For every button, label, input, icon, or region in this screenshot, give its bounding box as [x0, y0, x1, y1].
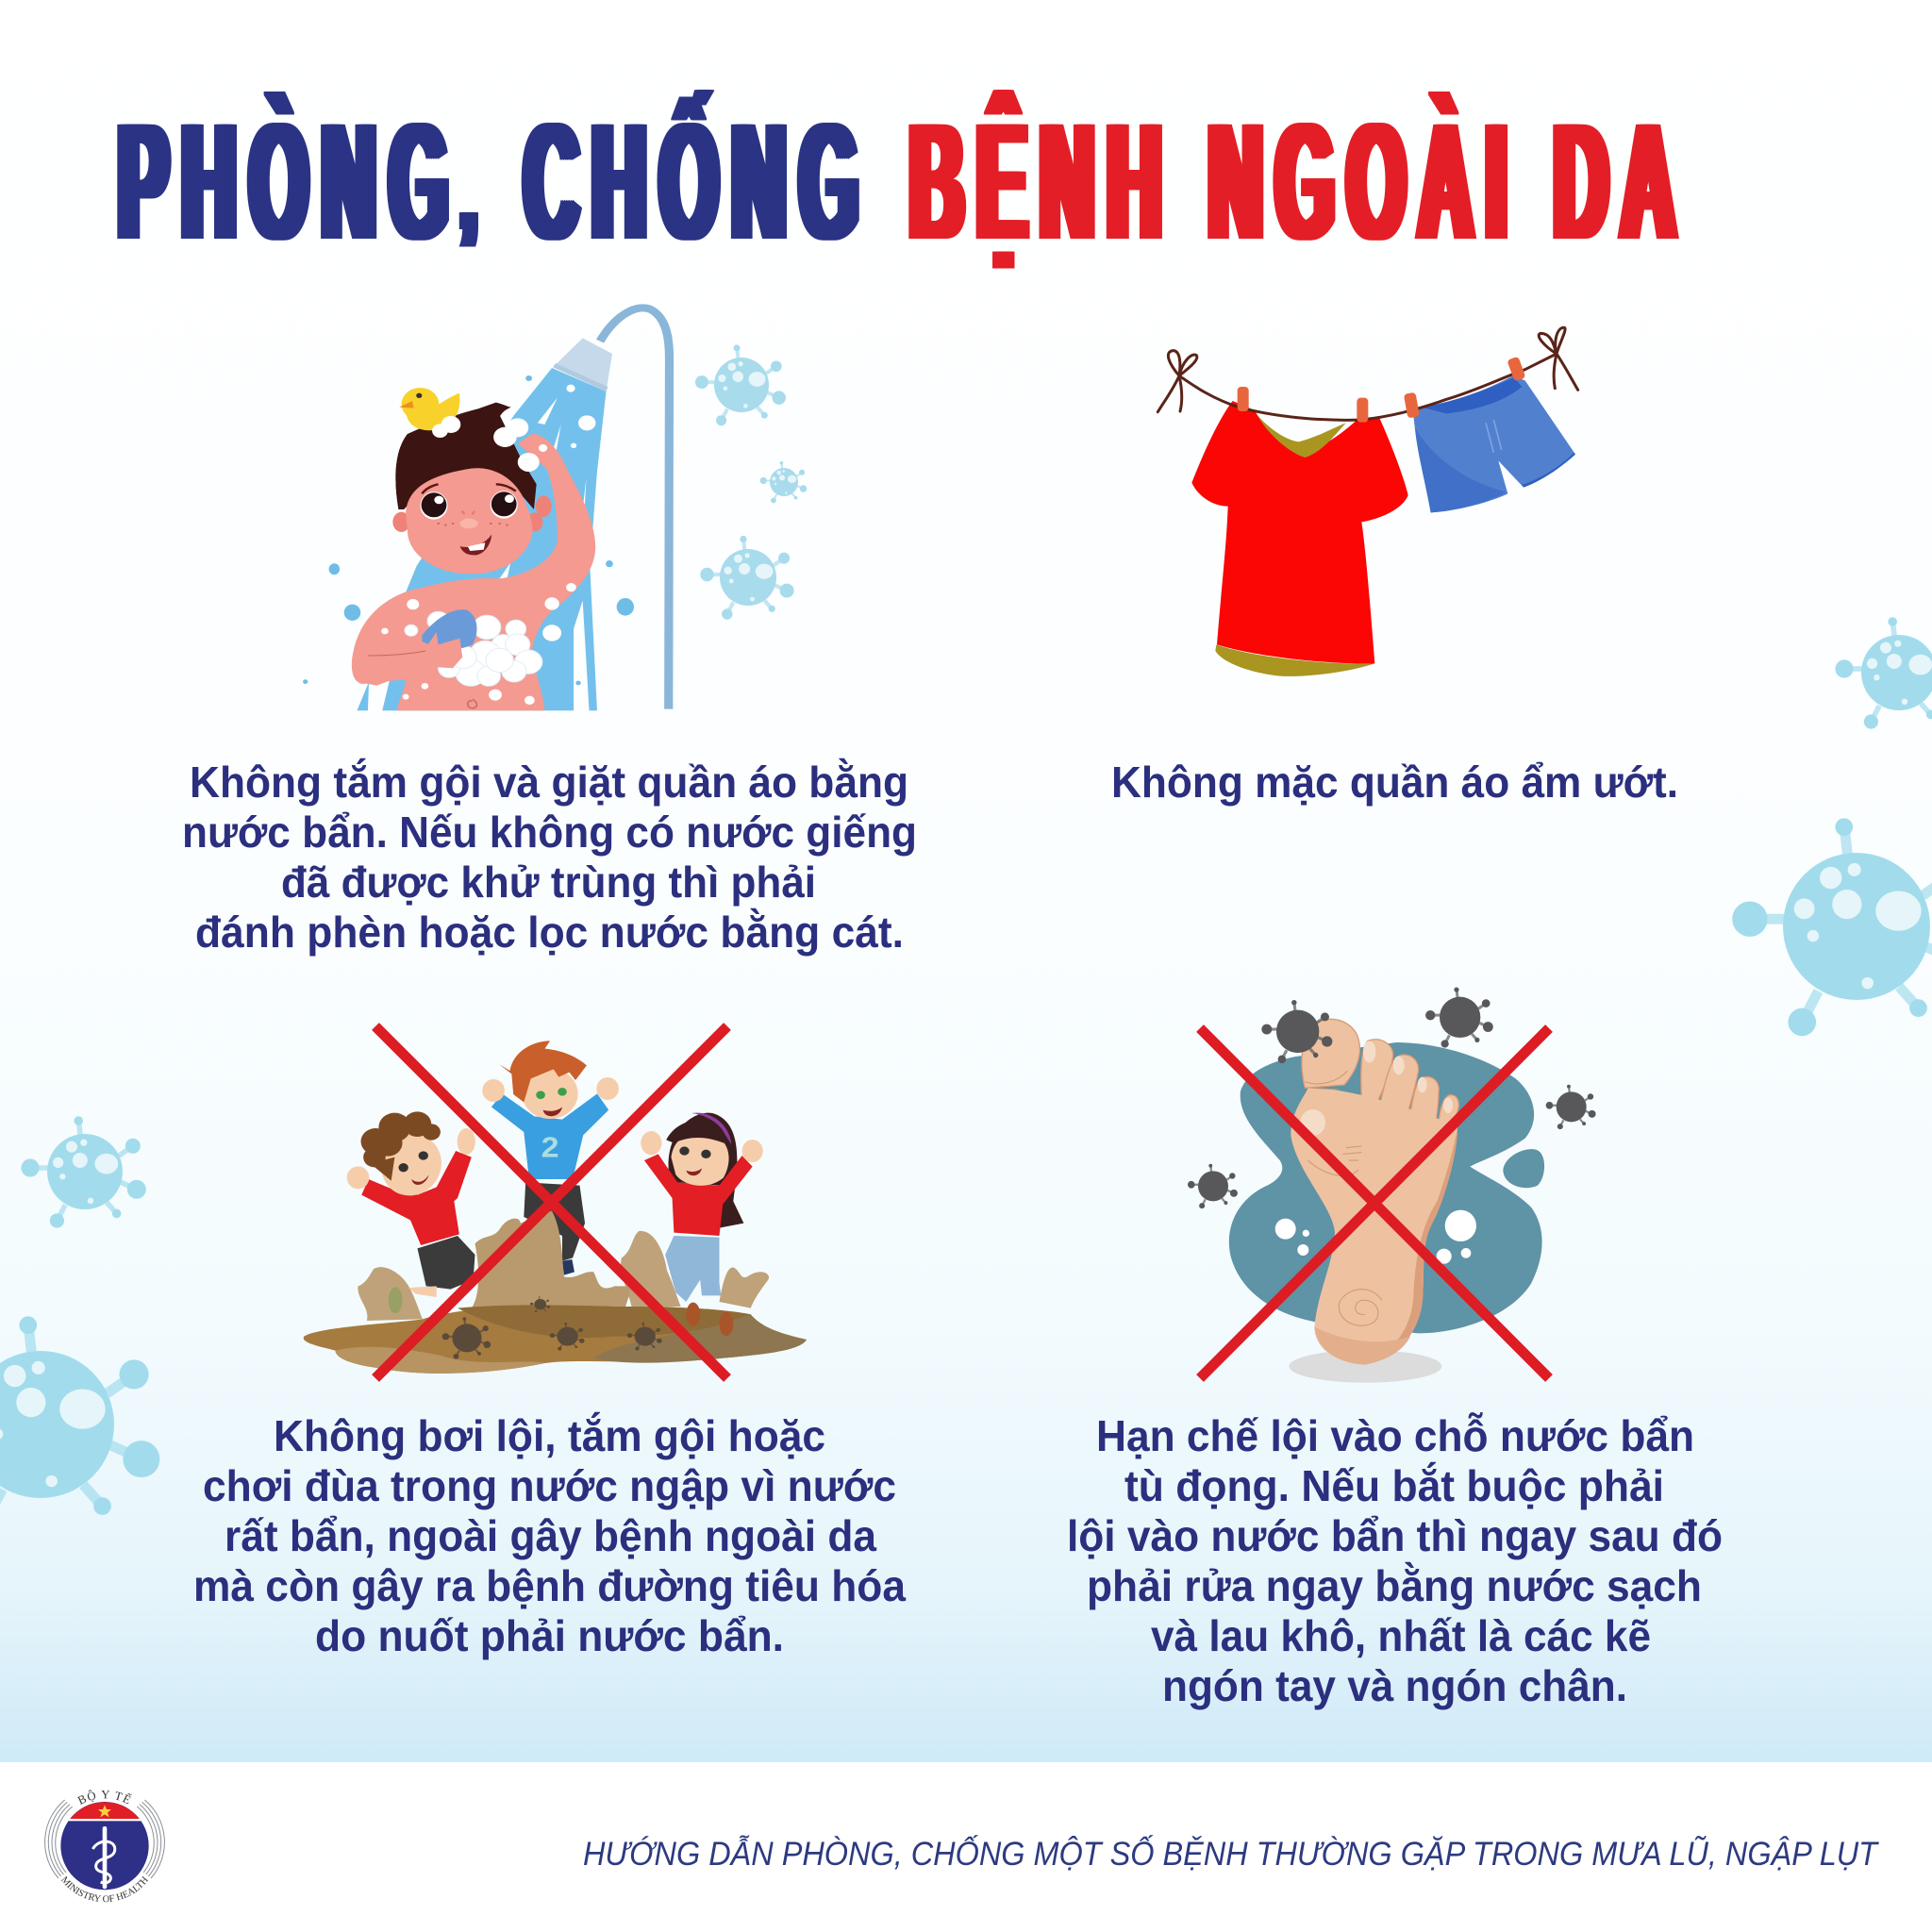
- eyes and mouth: [398, 1151, 429, 1185]
- puddle dark band: [458, 1305, 751, 1338]
- illustration: children in floodwater: [304, 1041, 807, 1374]
- text: dirty water advice: ngón tay và ngón chân.: [1162, 1661, 1627, 1710]
- hair fringe: [395, 403, 518, 509]
- navel: [468, 699, 476, 708]
- sole: [1291, 1088, 1457, 1365]
- text: dirty water advice: và lau khô, nhất là các kẽ: [1151, 1611, 1651, 1660]
- back mud splashes: [358, 1231, 769, 1321]
- side shading: [1365, 1129, 1457, 1365]
- hand on sponge: [358, 632, 462, 686]
- number on sweater: 2: [541, 1131, 559, 1163]
- skin bubbles: [381, 385, 595, 705]
- shorts hem: [1522, 453, 1575, 488]
- face: [671, 1132, 729, 1186]
- shower pipe: [600, 308, 669, 709]
- mud viruses: [442, 1296, 662, 1359]
- virus: large left: [0, 1316, 159, 1534]
- shorts: [1413, 375, 1575, 512]
- body foam: [405, 611, 542, 686]
- headband: [691, 1113, 731, 1144]
- heel creases: [1314, 1327, 1410, 1365]
- shirt lining: [1215, 413, 1374, 676]
- girl's shoes: [686, 1303, 733, 1336]
- nose and freckles: [439, 511, 508, 528]
- virus: large right: [1732, 818, 1932, 1036]
- clothes pegs: [1238, 357, 1525, 423]
- text: shower advice: đã được khử trùng thì phải: [281, 858, 816, 907]
- jeans: [665, 1236, 721, 1302]
- boy middle: [482, 1041, 619, 1275]
- eyes and mouth: [536, 1088, 567, 1116]
- dark viruses: [1188, 987, 1596, 1208]
- shirt: [1191, 401, 1408, 664]
- puddle shading: [593, 1314, 807, 1363]
- text: floodwater advice: rất bẩn, ngoài gây bệnh ngoài da: [225, 1511, 876, 1560]
- hands: [641, 1131, 763, 1162]
- girl: [641, 1113, 763, 1302]
- sweater: [361, 1151, 472, 1245]
- text: shower advice: nước bẩn. Nếu không có nước giếng: [182, 808, 917, 857]
- boy left: [347, 1111, 475, 1297]
- face: [522, 1069, 578, 1119]
- curly hair: [361, 1111, 441, 1181]
- logo red cap: [70, 1802, 140, 1819]
- shorts fly: [1486, 420, 1502, 453]
- title: PHÒNG, CHỐNG: [112, 90, 866, 275]
- logo disc: [60, 1802, 149, 1890]
- text: shower advice: Không tắm gội và giặt quần áo bằng: [190, 758, 908, 807]
- red cross: foot: [1200, 1028, 1549, 1378]
- hair foam: [432, 416, 547, 472]
- text: floodwater advice: [193, 1411, 906, 1660]
- water drop: [1503, 1149, 1544, 1188]
- eyes: [420, 491, 518, 520]
- hair back: [395, 415, 537, 509]
- text: floodwater advice: mà còn gây ra bệnh đường tiêu hóa: [193, 1561, 906, 1610]
- sweater: [644, 1154, 753, 1236]
- blue bubbles: [303, 375, 634, 685]
- logo divider: [66, 1819, 143, 1821]
- sweater: [491, 1093, 608, 1179]
- white bubbles: [1275, 1210, 1476, 1264]
- logo bottom text: MINISTRY OF HEALTH: [60, 1875, 149, 1902]
- toes: [1302, 1019, 1458, 1130]
- head: [406, 468, 532, 574]
- water highlights: [489, 398, 586, 580]
- logo top text: BỘ Y TẾ: [77, 1790, 132, 1805]
- text: dirty water advice: phải rửa ngay bằng nước sạch: [1087, 1561, 1702, 1610]
- mouth: [460, 535, 491, 555]
- water blob: [1229, 1042, 1542, 1333]
- text: shower advice: đánh phèn hoặc lọc nước bằng cát.: [195, 908, 904, 957]
- foot shadow: [1289, 1350, 1441, 1383]
- green stain: [389, 1287, 403, 1313]
- hair: [499, 1041, 587, 1102]
- mud mound and splashes: [472, 1210, 632, 1308]
- eyes and mouth: [679, 1146, 711, 1175]
- text: wet clothes advice: Không mặc quần áo ẩm ướt.: [1111, 758, 1678, 807]
- eyebrows: [422, 484, 516, 493]
- fringe: [666, 1121, 728, 1144]
- text: dirty water advice: Hạn chế lội vào chỗ nước bẩn: [1096, 1411, 1694, 1460]
- illustration: foot in dirty water: [1188, 987, 1596, 1383]
- rope and bows: [1158, 327, 1578, 420]
- hands: [347, 1128, 475, 1189]
- logo: Ministry of Health: [44, 1790, 165, 1902]
- illustration: child showering: [303, 308, 669, 710]
- body and raised arm: [352, 434, 595, 710]
- mud puddle: [304, 1306, 807, 1374]
- text: shower advice: [182, 758, 917, 957]
- illustration: wet clothes on line: [1158, 327, 1578, 676]
- logo star: [98, 1805, 111, 1817]
- title: BỆNH NGOÀI DA: [904, 90, 1683, 275]
- virus: small right: [1835, 617, 1932, 729]
- shower virus 3: [700, 536, 794, 620]
- red cross: children: [375, 1026, 727, 1378]
- ears: [392, 495, 552, 532]
- skin lines: [1305, 1071, 1382, 1325]
- face: [374, 1128, 449, 1202]
- shorts waistband: [1422, 377, 1522, 413]
- arm crease: [368, 651, 425, 656]
- text: dirty water advice: [1067, 1411, 1723, 1710]
- long hair: [669, 1113, 743, 1228]
- rubber duck: [399, 388, 459, 430]
- text: dirty water advice: tù đọng. Nếu bắt buộc phải: [1124, 1461, 1664, 1510]
- shower virus 2: [760, 461, 807, 503]
- legs: [417, 1236, 475, 1290]
- logo caduceus: [92, 1828, 115, 1887]
- logo rings: [45, 1800, 164, 1878]
- toe highlights: [1300, 1041, 1453, 1136]
- water stream: [357, 368, 607, 710]
- shower virus 1: [695, 344, 786, 425]
- text: floodwater advice: chơi đùa trong nước ngập vì nước: [203, 1461, 896, 1510]
- text: dirty water advice: lội vào nước bẩn thì ngay sau đó: [1067, 1511, 1723, 1560]
- sponge: [422, 609, 477, 649]
- shoe: [562, 1259, 575, 1275]
- text: floodwater advice: do nuốt phải nước bẩn.: [315, 1611, 784, 1660]
- shower head: [553, 338, 612, 391]
- hands: [482, 1077, 619, 1102]
- shorts fold shading: [1415, 427, 1507, 512]
- title: [112, 90, 1683, 275]
- virus: small left: [21, 1116, 146, 1228]
- text: floodwater advice: Không bơi lội, tắm gội hoặc: [274, 1411, 825, 1460]
- trousers: [524, 1182, 585, 1261]
